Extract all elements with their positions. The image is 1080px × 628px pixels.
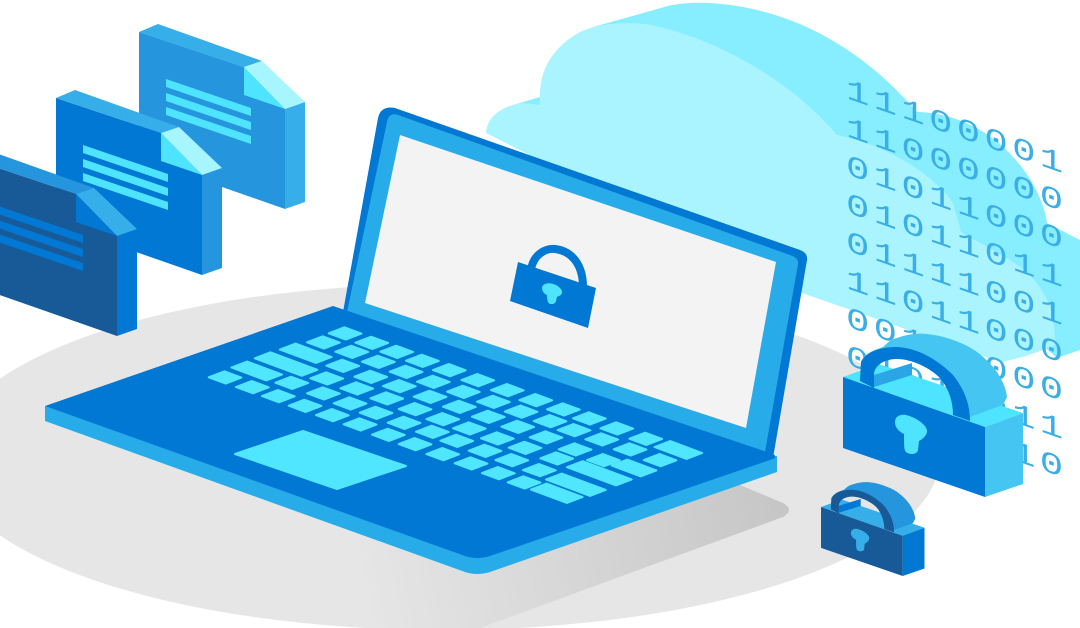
binary digits: 11011010 [846, 377, 1067, 488]
laptop [45, 107, 807, 574]
binary digits [846, 73, 1067, 488]
big padlock [843, 334, 1023, 497]
laptop lid [343, 107, 807, 458]
binary digits: 11011000 [846, 263, 1067, 374]
document: front [0, 151, 137, 336]
binary digits: 01011011 [846, 339, 1067, 450]
keyboard [209, 327, 702, 503]
document: back [139, 24, 305, 209]
binary digits: 11000000 [846, 111, 1067, 222]
document: middle [56, 90, 222, 275]
screen padlock [510, 249, 596, 328]
laptop base [45, 306, 776, 558]
trackpad [235, 431, 406, 489]
binary digits: 01011011 [846, 187, 1067, 298]
laptop cast shadow [467, 485, 789, 628]
binary digits: 01011000 [846, 149, 1067, 260]
binary digits: 01111001 [846, 225, 1067, 336]
binary digits: 00111000 [846, 301, 1067, 412]
laptop base lip [45, 406, 777, 574]
screen [365, 135, 776, 428]
ground shadow ellipse [0, 284, 940, 628]
cloud [486, 3, 1080, 362]
small keyhole [851, 529, 869, 551]
binary digits: 11100001 [846, 73, 1067, 184]
keyhole [895, 415, 927, 454]
small padlock [821, 482, 924, 576]
